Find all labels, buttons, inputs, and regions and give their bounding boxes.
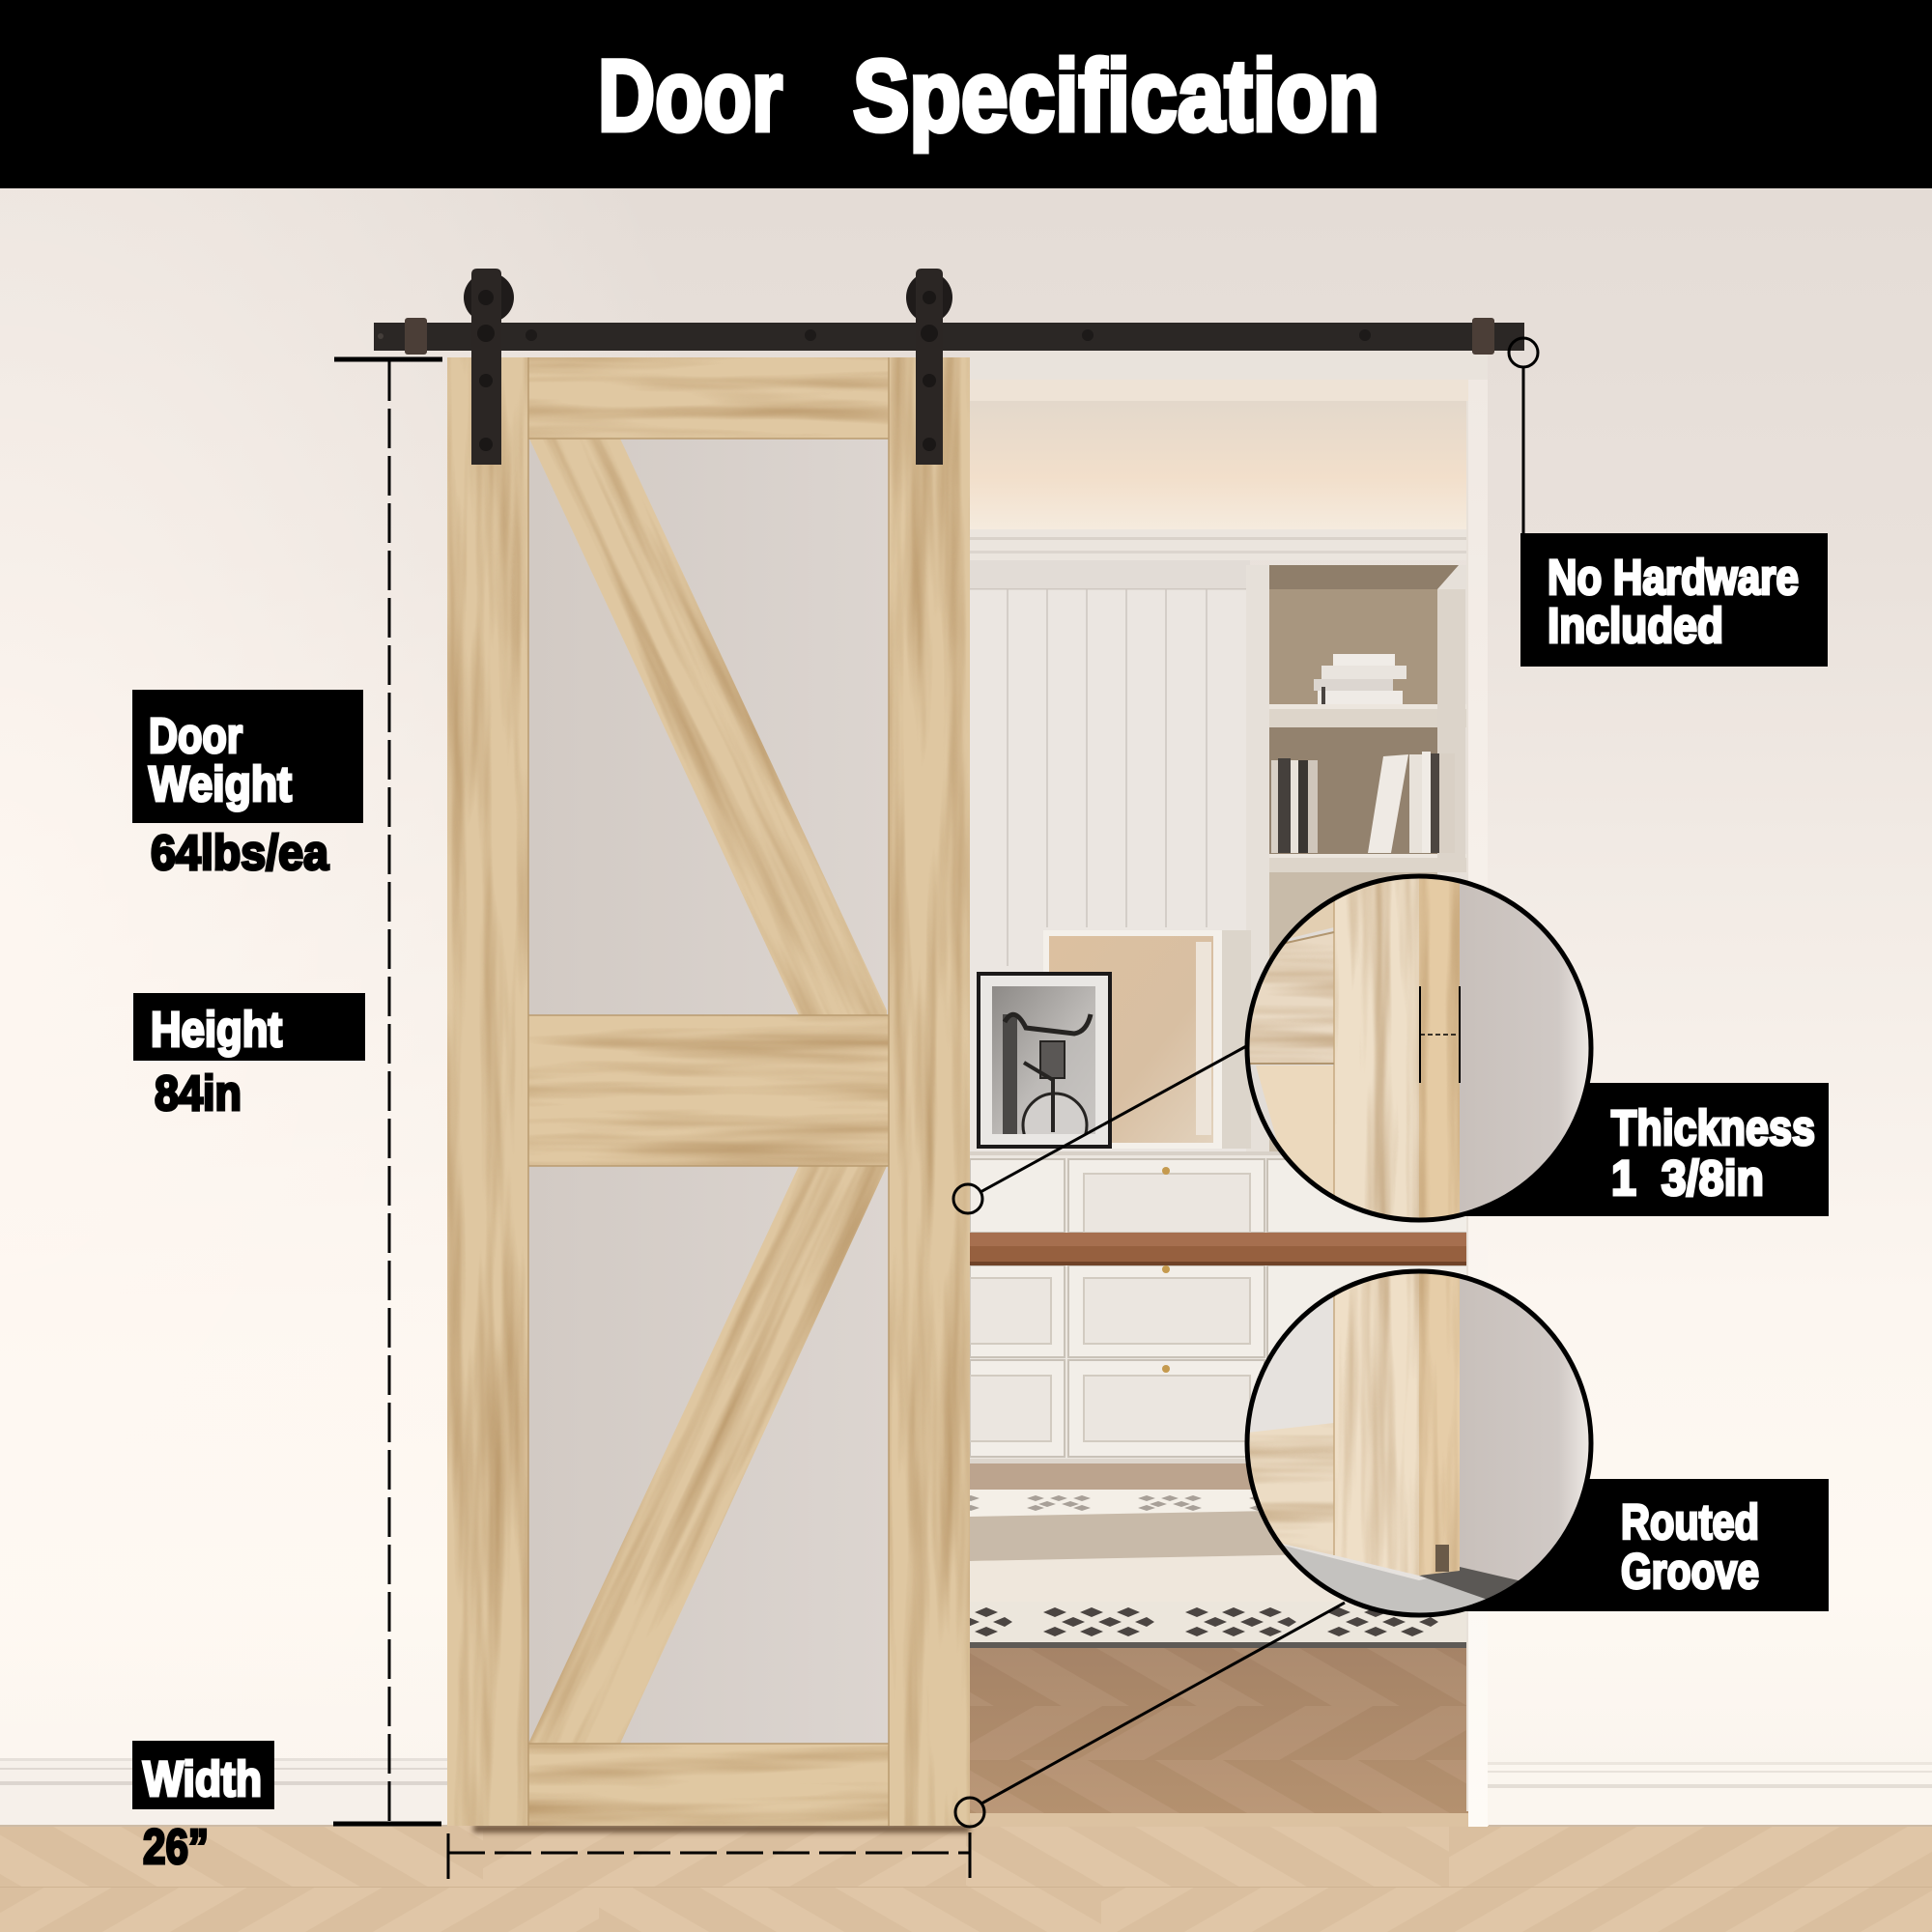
height dimension line xyxy=(333,359,442,1826)
callout: no hardware: Included xyxy=(1548,598,1723,653)
callout: height xyxy=(133,993,365,1121)
wooden countertop xyxy=(970,1233,1468,1265)
callout: routed groove: Groove xyxy=(1621,1544,1759,1599)
rail stopper left xyxy=(405,318,427,355)
callout: width: Width xyxy=(143,1751,262,1806)
wall behind xyxy=(1460,876,1591,1220)
upright books right xyxy=(1368,752,1455,853)
left stile xyxy=(447,357,528,1826)
callout: no hardware xyxy=(1509,338,1828,667)
thickness marker xyxy=(1420,986,1460,1083)
floor xyxy=(0,1825,1932,1932)
title banner: Specification xyxy=(853,40,1379,153)
groove notch xyxy=(1435,1545,1449,1572)
stacked books xyxy=(1314,654,1406,704)
framed bicycle photo xyxy=(977,972,1112,1157)
door face xyxy=(1334,876,1419,1220)
detail circle: door thickness xyxy=(1247,876,1591,1220)
sliding track rail xyxy=(374,318,1524,355)
callout: width xyxy=(132,1741,274,1874)
door jamb xyxy=(1466,380,1488,1827)
bookshelf xyxy=(1246,565,1468,1164)
callout: thickness: Thickness xyxy=(1611,1100,1815,1155)
callout: door weight xyxy=(132,690,363,880)
callout: width: 26” xyxy=(143,1819,209,1874)
rail pieces xyxy=(1247,932,1334,1063)
interior floor xyxy=(970,1648,1489,1827)
callout: routed groove: Routed xyxy=(1621,1494,1759,1549)
hanger strap right xyxy=(906,269,952,465)
door shadow xyxy=(473,1825,970,1833)
bottom diagonal brace xyxy=(529,1167,887,1743)
top rail xyxy=(528,357,889,439)
cabinets xyxy=(970,1151,1468,1465)
top diagonal brace xyxy=(529,439,887,1014)
width dimension line xyxy=(448,1833,970,1879)
callout: door weight: 64lbs/ea xyxy=(151,825,329,880)
lower rail xyxy=(1247,1423,1334,1555)
callout: no hardware: No Hardware xyxy=(1548,550,1799,605)
wall behind xyxy=(1460,1279,1575,1580)
door edge xyxy=(1419,1271,1460,1576)
callout: door weight: Weight xyxy=(149,756,292,811)
door face xyxy=(1334,1271,1419,1576)
callout: thickness: 1 3/8in xyxy=(1611,1151,1764,1206)
rear floor and rug xyxy=(970,1459,1468,1648)
ceiling xyxy=(970,401,1468,529)
crown moulding xyxy=(970,529,1468,560)
floor xyxy=(1284,1546,1460,1613)
hanger strap left xyxy=(464,269,514,465)
middle rail xyxy=(528,1015,889,1166)
door frame head xyxy=(970,351,1488,380)
detail circle: routed groove xyxy=(1247,1271,1591,1615)
bottom rail xyxy=(528,1744,889,1826)
doorway interior scene xyxy=(970,351,1489,1827)
callout: height: Height xyxy=(151,1002,282,1057)
right stile xyxy=(889,357,970,1826)
beadboard wall xyxy=(970,560,1250,1159)
door edge xyxy=(1419,876,1460,1220)
title: Door xyxy=(598,40,782,153)
callout: door weight: Door xyxy=(149,708,242,763)
watercolour art xyxy=(1043,930,1251,1149)
callout: thickness xyxy=(1430,1083,1829,1216)
leader: thickness circle xyxy=(953,1045,1248,1213)
callout: height: 84in xyxy=(155,1065,242,1121)
callout: routed groove xyxy=(1430,1479,1829,1611)
leader: groove circle xyxy=(955,1603,1345,1827)
baseboard xyxy=(0,1758,1932,1826)
glass panel xyxy=(528,439,889,1744)
title banner xyxy=(0,0,1932,188)
upright books left xyxy=(1271,758,1318,853)
barn door xyxy=(447,323,972,1861)
rail stopper right xyxy=(1472,318,1494,355)
